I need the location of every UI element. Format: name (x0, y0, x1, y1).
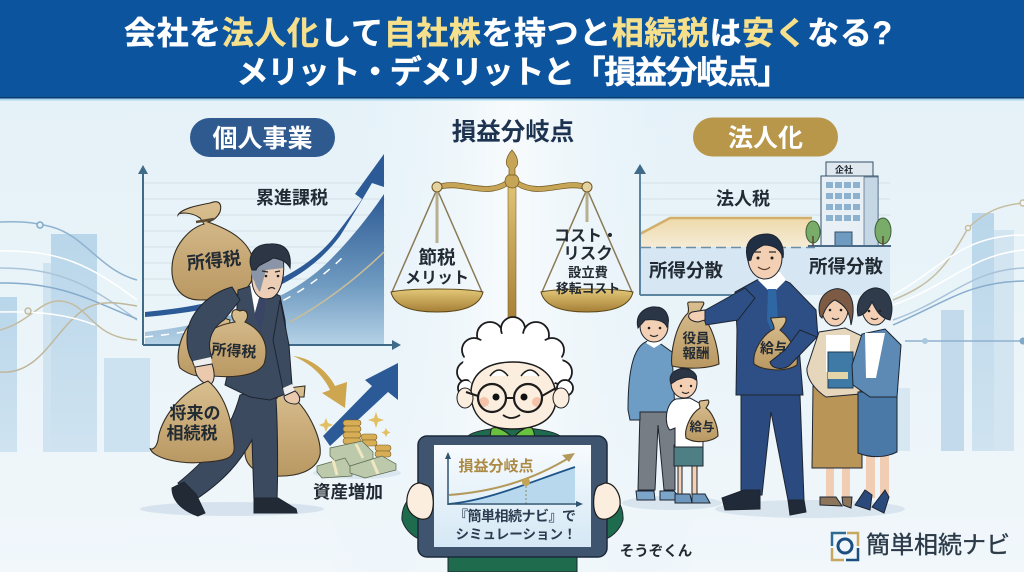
hands (407, 483, 620, 519)
character: Souzoku-kun (402, 317, 623, 572)
panel: incorporated chart (634, 118, 891, 295)
corporate tax graph: 所得分散 (809, 256, 883, 277)
heading pill: 個人事業 (190, 118, 335, 157)
icon: office building: 企社 (835, 164, 853, 175)
corporate tax graph: 所得分散 (649, 260, 723, 281)
hair (457, 317, 573, 397)
corporate tax graph: 法人税 (716, 189, 770, 209)
left pan: 節税 (418, 247, 456, 268)
icon: office building (806, 162, 891, 246)
bag: income tax in arm: 所得税 (211, 341, 257, 362)
illustration: businessman carrying tax bags (140, 202, 324, 516)
head (250, 244, 290, 299)
right pan (541, 228, 633, 312)
bag: future inheritance tax (150, 381, 234, 463)
tablet: 『簡単相続ナビ』で (454, 508, 576, 524)
right pan: リスク (563, 244, 613, 263)
label: asset growth: 資産増加 (313, 482, 383, 502)
illustration: balance scale (391, 150, 633, 323)
title banner: メリット・デメリットと「損益分岐点」 (236, 54, 790, 90)
arrow: asset growth (323, 363, 398, 446)
bag: salary (754, 317, 817, 370)
left pan (391, 247, 483, 312)
tablet: 損益分岐点 (458, 457, 534, 475)
child: 給与 (689, 419, 715, 434)
businessman (689, 234, 818, 515)
right pan: 設立費 (568, 264, 608, 280)
arms (402, 490, 623, 540)
progressive tax graph: 累進課税 (256, 188, 328, 208)
bag: salary: 給与 (760, 340, 788, 356)
arrow: gold curve (293, 356, 347, 408)
left pan: メリット (405, 270, 469, 287)
tablet (418, 436, 607, 557)
body (448, 428, 577, 572)
right pan: コスト・ (554, 228, 618, 245)
heading pill: 法人化: 法人化 (728, 124, 803, 152)
heading: break-even point: 損益分岐点 (452, 118, 574, 146)
face (471, 362, 556, 429)
bag: income tax on back (172, 202, 254, 300)
legs (172, 385, 297, 516)
bag: executive pay: 役員 (682, 331, 710, 346)
bag: future inheritance tax: 相続税 (166, 424, 218, 443)
bag: executive pay (672, 302, 719, 368)
bow tie (490, 427, 535, 450)
progressive tax graph (138, 154, 401, 350)
bag: income tax in arm (192, 310, 266, 377)
title banner (0, 0, 1024, 100)
torso and suit (225, 284, 300, 404)
woman in blue suit (852, 288, 901, 513)
bag: behind the waist (178, 312, 230, 377)
woman with folder (807, 289, 862, 508)
label: Souzoku-kun name: そうぞくん (620, 543, 692, 560)
bag: income tax on back: 所得税 (186, 248, 242, 274)
heading pill: 法人化 (693, 118, 838, 156)
corporate tax graph (634, 164, 890, 295)
icon: coins and bills (313, 412, 401, 479)
illustration: family with salary bags (622, 234, 905, 518)
father (628, 307, 682, 500)
tablet: シミュレーション！ (456, 527, 576, 542)
right pan: 移転コスト (556, 281, 620, 296)
panel: sole proprietorship chart (138, 118, 401, 350)
title banner: 会社を法人化して自社株を持つと相続税は安くなる? (124, 15, 892, 51)
logo icon (832, 533, 858, 560)
bag: future inheritance tax: 将来の (170, 404, 220, 423)
left arm (187, 287, 240, 384)
bag: right hand (245, 386, 320, 476)
bag: executive pay: 報酬 (682, 346, 710, 361)
child (666, 368, 718, 503)
logo: Kantan Souzoku Navi: 簡単相続ナビ (866, 532, 1010, 559)
heading pill: 個人事業: 個人事業 (212, 125, 313, 153)
